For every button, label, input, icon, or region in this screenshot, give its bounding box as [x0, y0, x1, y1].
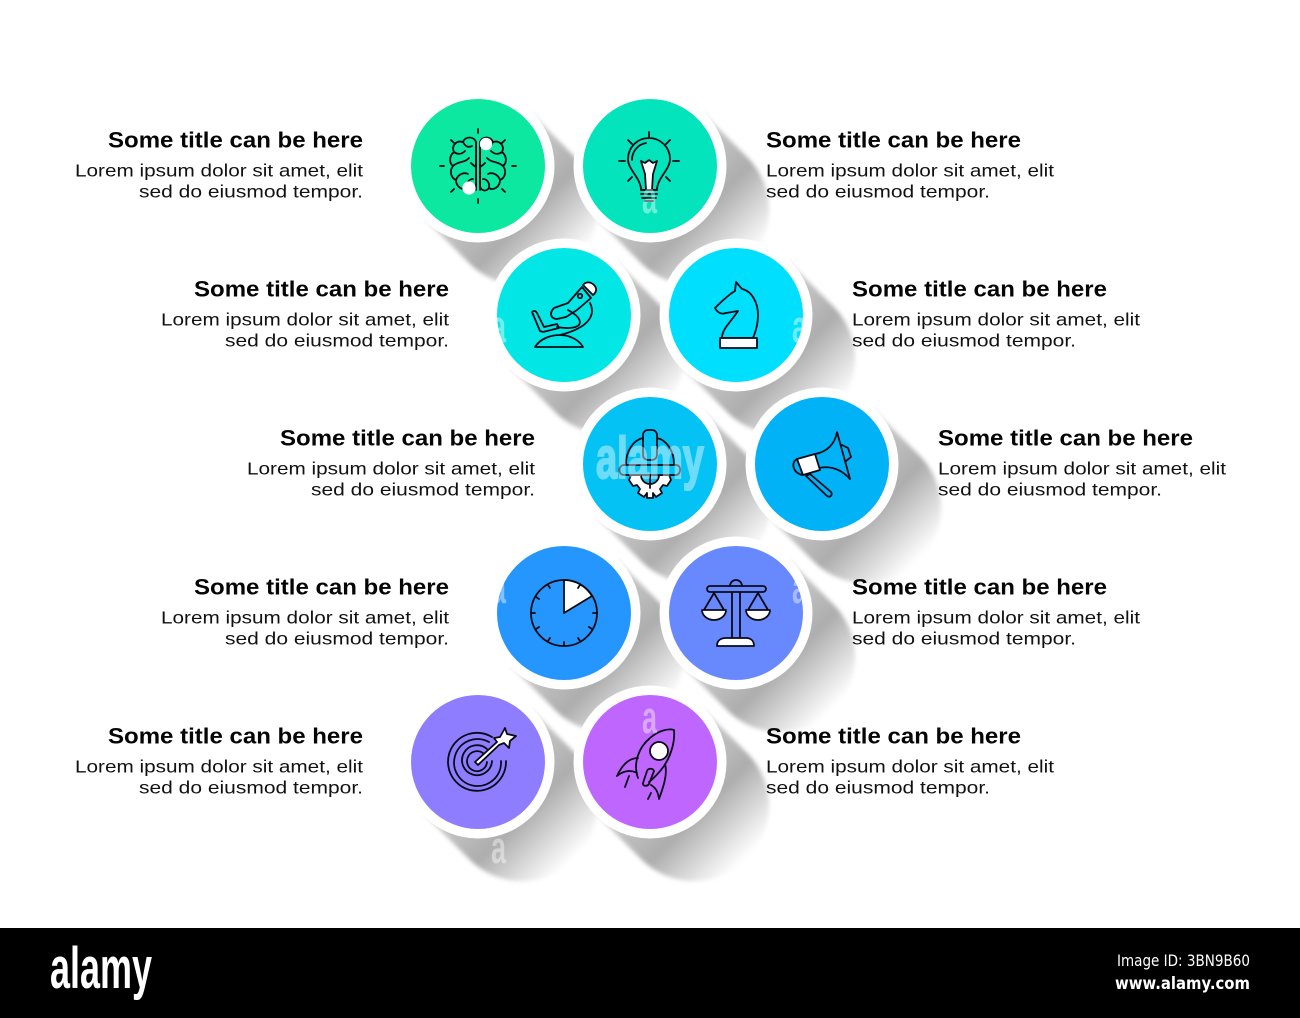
text: item 7: Lorem ipsum dolor sit amet, elit [161, 608, 449, 628]
text: item 1: Lorem ipsum dolor sit amet, elit [75, 160, 363, 180]
text: item 4: Some title can be here [852, 276, 1107, 302]
text: item 2: Lorem ipsum dolor sit amet, elit [766, 160, 1054, 180]
text: item 4: sed do eiusmod tempor. [852, 330, 1076, 350]
text: item 9: Lorem ipsum dolor sit amet, elit [75, 756, 363, 776]
footer image id: Image ID: 3BN9B60 [1117, 951, 1250, 970]
circle: light bulb [574, 90, 726, 242]
circle: megaphone [746, 388, 898, 540]
icon: light bulb [619, 132, 679, 201]
circle: clock [488, 536, 640, 690]
footer bar [0, 928, 1300, 1018]
circle: rocket [574, 686, 726, 838]
text: item 5: Lorem ipsum dolor sit amet, elit [247, 458, 535, 478]
text: item 7: Some title can be here [194, 574, 449, 600]
text: item 1: Some title can be here [108, 128, 363, 152]
text: item 10 [766, 724, 1054, 798]
icon: chess knight [715, 282, 758, 348]
circle: chess knight [660, 238, 812, 392]
icon: target [448, 728, 516, 791]
text: item 3: sed do eiusmod tempor. [225, 330, 449, 350]
footer url: www.alamy.com [1115, 974, 1250, 994]
circle: target [402, 686, 554, 838]
text: item 8: Some title can be here [852, 574, 1107, 600]
text: item 5: sed do eiusmod tempor. [311, 480, 535, 500]
text: item 3: Lorem ipsum dolor sit amet, elit [161, 310, 449, 330]
text: item 6: Lorem ipsum dolor sit amet, elit [938, 458, 1226, 478]
text: item 5: Some title can be here [280, 426, 535, 450]
text: item 2: sed do eiusmod tempor. [766, 182, 990, 202]
text: item 9: sed do eiusmod tempor. [139, 778, 363, 798]
text: item 10: Some title can be here [766, 724, 1021, 748]
text: item 2: Some title can be here [766, 128, 1021, 152]
watermark: a [491, 562, 507, 613]
text: item 8 [852, 574, 1140, 648]
text: item 8: Lorem ipsum dolor sit amet, elit [852, 608, 1140, 628]
watermark: a [792, 562, 808, 613]
text: item 1 [75, 128, 363, 202]
text: item 9 [75, 724, 363, 798]
icon: microscope [532, 282, 596, 347]
text: item 1: sed do eiusmod tempor. [139, 182, 363, 202]
text: item 10: sed do eiusmod tempor. [766, 778, 990, 798]
text: item 7: sed do eiusmod tempor. [225, 628, 449, 648]
circle: helmet and gear [574, 388, 726, 540]
footer logo: alamy [50, 936, 152, 1001]
text: item 9: Some title can be here [108, 724, 363, 748]
text: item 4: Lorem ipsum dolor sit amet, elit [852, 310, 1140, 330]
text: item 7 [161, 574, 449, 648]
icon: rocket [617, 729, 674, 799]
text: item 6: Some title can be here [938, 426, 1193, 450]
circle: brain [402, 90, 554, 242]
text: item 8: sed do eiusmod tempor. [852, 628, 1076, 648]
icon: scales [702, 580, 770, 646]
watermark [491, 172, 808, 873]
watermark: a [792, 301, 808, 352]
icon: clock [531, 580, 597, 646]
watermark: a [491, 822, 507, 873]
text: item 5 [247, 426, 535, 500]
icon: brain [440, 129, 516, 203]
watermark: a [491, 301, 507, 352]
text: item 6: sed do eiusmod tempor. [938, 480, 1162, 500]
text: item 4 [852, 276, 1140, 350]
text: item 6 [938, 426, 1226, 500]
text: item 2 [766, 128, 1054, 202]
text: item 3: Some title can be here [194, 276, 449, 302]
icon: megaphone [793, 432, 851, 497]
circle: scales [660, 536, 812, 690]
watermark: a [642, 692, 658, 743]
watermark: a [642, 172, 658, 223]
text: item 10: Lorem ipsum dolor sit amet, elit [766, 756, 1054, 776]
icon: helmet and gear [620, 430, 680, 498]
circle: microscope [488, 238, 640, 392]
long shadows [425, 113, 941, 881]
watermark: alamy [596, 426, 704, 491]
text: item 3 [161, 276, 449, 350]
